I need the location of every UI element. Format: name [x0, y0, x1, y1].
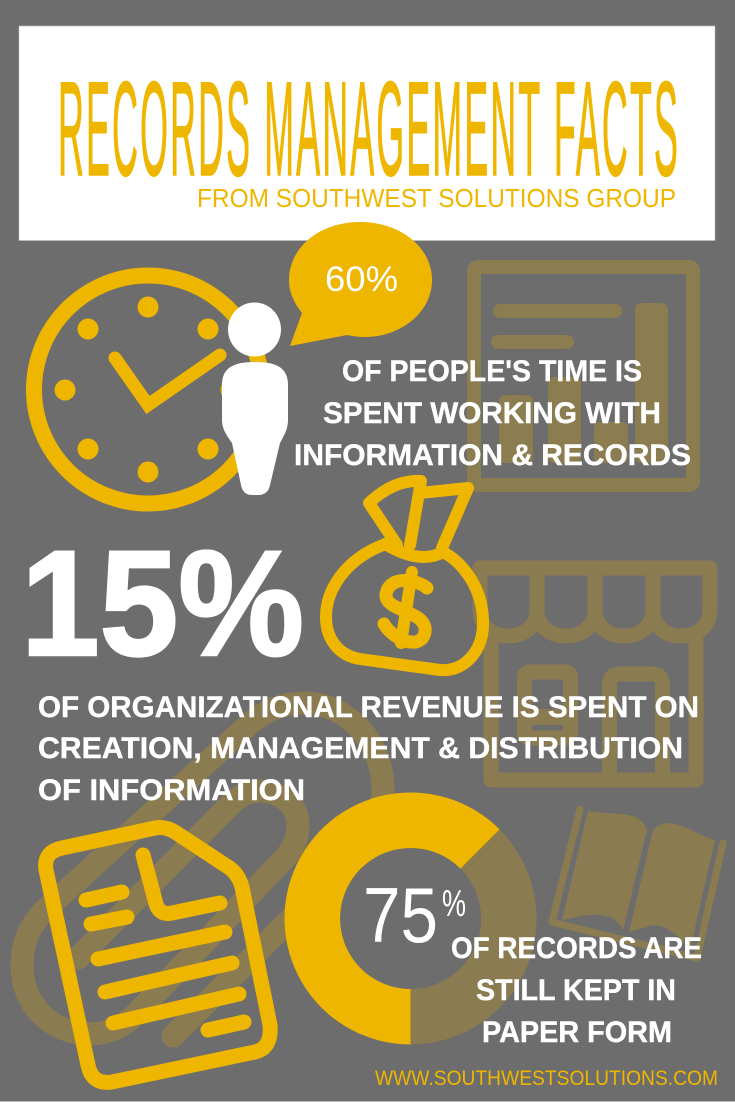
icon: money bag — [326, 481, 483, 670]
text: organizational revenue: CREATION, MANAGEMENT & DISTRIBUTION — [38, 732, 683, 765]
text: paper form: OF RECORDS ARE — [451, 932, 702, 965]
icon: paperclip (background) — [22, 703, 383, 1036]
stat: percent sign: % — [442, 883, 466, 924]
icon: clock — [34, 276, 262, 504]
text: paper form — [451, 932, 702, 1049]
icon: open book (background) — [552, 809, 723, 958]
text: organizational revenue: OF ORGANIZATIONAL REVENUE IS SPENT ON — [38, 691, 699, 724]
text: organizational revenue: OF INFORMATION — [38, 774, 305, 807]
text: people's time: INFORMATION & RECORDS — [294, 439, 691, 472]
text: people's time: SPENT WORKING WITH — [323, 397, 661, 430]
text: paper form: PAPER FORM — [482, 1016, 672, 1049]
text: organizational revenue — [38, 691, 699, 807]
text: people's time — [294, 355, 691, 472]
icon: document — [46, 828, 270, 1082]
text: paper form: STILL KEPT IN — [476, 974, 676, 1007]
icon: speech bubble — [289, 222, 432, 346]
subtitle: FROM SOUTHWEST SOLUTIONS GROUP — [197, 183, 676, 213]
text: people's time: OF PEOPLE'S TIME IS — [342, 355, 642, 388]
chart: donut 75% — [285, 793, 537, 1044]
stat: 60%: 60% — [325, 260, 398, 299]
panel: header — [19, 26, 715, 240]
stat: 75: 75 — [363, 871, 438, 959]
icon: storefront (background) — [480, 568, 710, 780]
icon: person — [222, 302, 288, 495]
stat: 15%: 15% — [21, 519, 304, 687]
icon: report with bar chart (background) — [474, 267, 693, 485]
